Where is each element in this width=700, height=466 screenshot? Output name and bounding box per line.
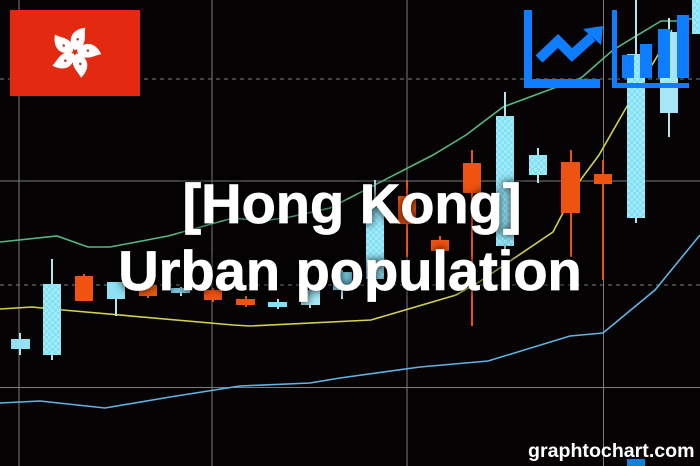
icon: bauhinia flower <box>49 25 102 79</box>
candle 22 <box>692 0 700 34</box>
title <box>118 172 582 302</box>
title line 2: Urban population <box>118 239 582 302</box>
candle 7 <box>204 288 222 302</box>
candle 19 <box>594 160 612 280</box>
candle 21 <box>660 18 678 137</box>
candle 14 <box>431 236 449 256</box>
infographic canvas: Urban population <box>118 239 582 302</box>
line: green moving average <box>0 17 700 247</box>
flag of Hong Kong <box>10 10 140 96</box>
line: blue moving average <box>0 235 700 408</box>
candle 13 <box>398 180 416 257</box>
candle 8 <box>236 296 255 307</box>
icon: line chart with rising arrow <box>524 10 603 88</box>
title line 1: [Hong Kong] <box>183 172 521 235</box>
candle 18 <box>561 150 580 257</box>
candle 4 <box>107 282 125 316</box>
candle 23 <box>627 459 645 466</box>
candle 5 <box>139 285 157 298</box>
candle 12 <box>366 180 384 290</box>
candle 20 <box>627 0 645 223</box>
candle 17 <box>529 148 547 183</box>
candle 6 <box>171 287 190 296</box>
icon: bar chart <box>612 10 689 88</box>
candle 16 <box>496 92 514 252</box>
candle 3 <box>75 274 93 301</box>
footer: site name: graphtochart.com <box>528 440 695 462</box>
line: yellow moving average <box>0 30 672 326</box>
infographic canvas: [Hong Kong] <box>183 172 521 235</box>
candle 10 <box>301 285 320 308</box>
candle 1 <box>11 333 30 355</box>
candle 2 <box>43 259 61 360</box>
candle 9 <box>268 299 287 309</box>
candle 11 <box>333 270 352 299</box>
candle 15 <box>463 150 481 326</box>
